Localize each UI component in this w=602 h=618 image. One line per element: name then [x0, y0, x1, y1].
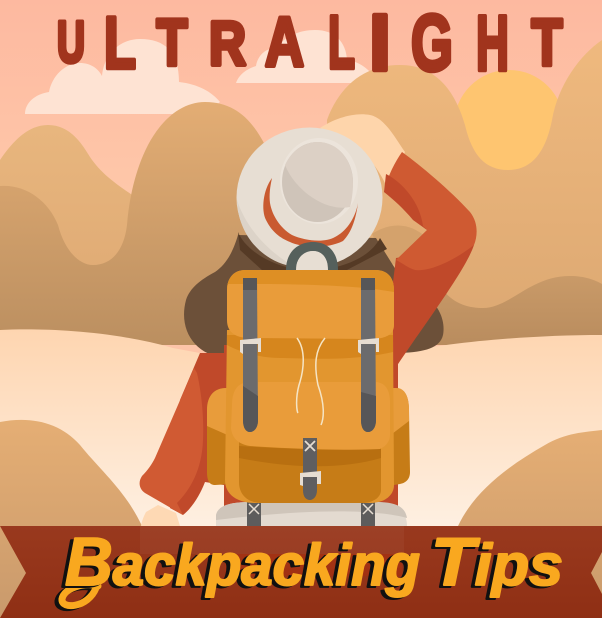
subtitle: Backpacking Tips — [58, 524, 563, 608]
centre buckle — [300, 471, 321, 486]
ghost of figure through banner — [140, 526, 404, 576]
subtitle word two: Tips — [431, 524, 563, 600]
bedroll strap right — [361, 500, 375, 526]
pack mid shade — [227, 335, 393, 359]
sky background — [0, 0, 602, 340]
title: ULTRALIGHT: L — [328, 0, 355, 84]
title: ULTRALIGHT: T — [156, 5, 188, 79]
title: ULTRALIGHT: L — [104, 3, 136, 84]
cloud: right — [236, 30, 378, 83]
hair shadow at neck — [238, 232, 387, 271]
right buckle — [358, 338, 379, 354]
backpack — [207, 242, 410, 526]
right strap shade — [361, 278, 376, 432]
hat crown rim — [280, 138, 358, 224]
side pocket right — [388, 388, 410, 486]
subtitle word one: Backpacking — [65, 524, 420, 600]
flap shadow — [239, 446, 381, 466]
strap crosses — [249, 504, 373, 514]
left hand — [141, 505, 180, 526]
bedroll strap left — [247, 500, 261, 526]
hat brim — [236, 128, 382, 268]
title: ULTRALIGHT: G — [411, 0, 453, 87]
sun — [454, 70, 564, 180]
hair — [184, 235, 400, 358]
title: ULTRALIGHT: H — [476, 0, 509, 87]
left arm highlight — [140, 368, 203, 515]
cloud: left — [25, 39, 220, 114]
title: ULTRALIGHT: T — [532, 5, 562, 79]
left buckle — [240, 338, 261, 354]
mountain: right lower ridge — [420, 276, 602, 345]
ghost bedroll — [140, 526, 404, 554]
hand raised to hat — [320, 114, 405, 190]
pack body — [225, 330, 394, 503]
hill: bottom right — [458, 430, 602, 618]
handle loop — [286, 242, 338, 270]
centre strap cross — [305, 441, 315, 451]
subtitle shadow word two: Tips — [427, 526, 559, 602]
mountain: back right — [327, 40, 602, 340]
centre strap — [303, 438, 317, 500]
drawstring left — [297, 338, 303, 413]
hat brim shade — [237, 200, 295, 267]
title: ULTRALIGHT: R — [209, 10, 246, 79]
right arm sleeve upper — [384, 152, 477, 270]
bedroll — [216, 502, 407, 526]
body torso — [224, 345, 398, 507]
hat crown highlight — [285, 142, 353, 208]
left strap shade — [243, 278, 258, 432]
drawstring right — [316, 338, 325, 425]
lid — [227, 270, 394, 339]
hat band — [263, 178, 358, 247]
B loop flourish — [62, 585, 98, 606]
hat crown — [282, 142, 353, 222]
front pocket flap — [231, 382, 390, 451]
hair right blob — [395, 298, 444, 353]
hill: bottom left — [0, 420, 142, 618]
ribbon banner — [0, 526, 602, 618]
right arm sleeve lower — [392, 245, 474, 372]
B loop flourish shadow — [58, 587, 94, 608]
mountain: left light hill — [0, 125, 135, 300]
mountain: left dark range — [0, 102, 275, 345]
hiker figure — [140, 114, 477, 526]
bedroll shade — [216, 502, 407, 520]
ghost torso — [225, 554, 402, 576]
lid top shade — [227, 270, 394, 292]
subtitle shadow: Backpacking — [61, 526, 416, 602]
foreground dune — [0, 329, 602, 530]
title: ULTRALIGHT: A — [265, 3, 304, 81]
handle opening — [296, 251, 328, 270]
shaded ground behind bent arm — [372, 225, 427, 266]
side pocket right top — [388, 388, 409, 437]
title: ULTRALIGHT: I — [369, 0, 391, 87]
title: ULTRALIGHT: U — [57, 10, 85, 75]
side pocket left — [207, 388, 232, 485]
right strap — [361, 278, 376, 432]
left strap — [243, 278, 258, 432]
title: ULTRALIGHT — [57, 0, 562, 87]
left arm sleeve dark — [170, 353, 230, 515]
lower front pocket — [239, 440, 381, 503]
side pocket left top — [207, 388, 232, 437]
right arm inner shade — [384, 174, 427, 230]
